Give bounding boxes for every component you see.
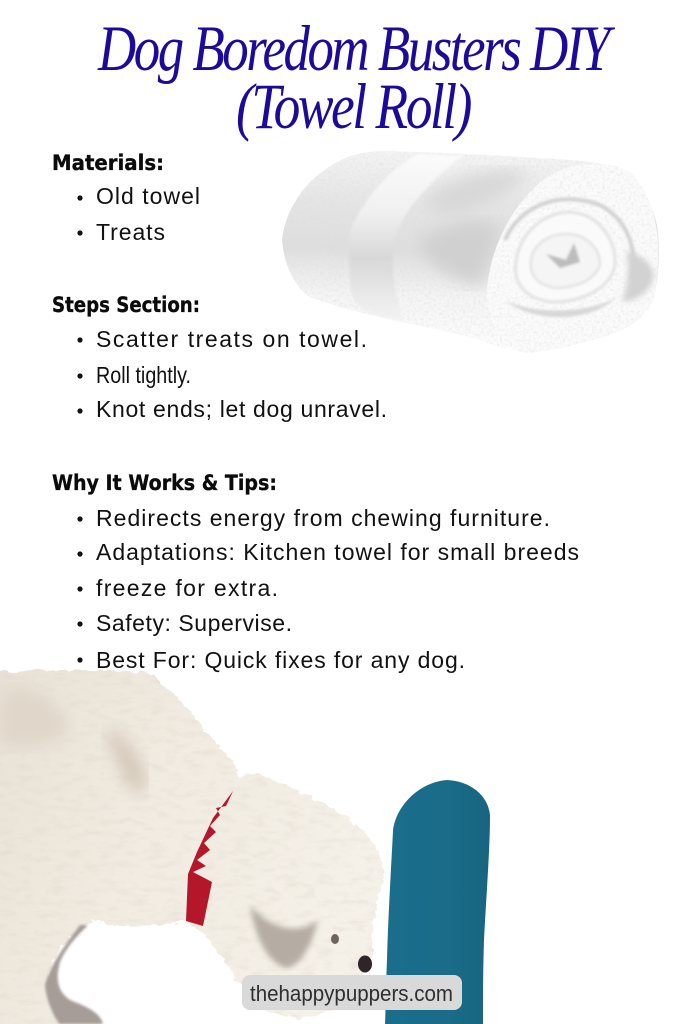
website badge: thehappypuppers.com: [250, 981, 453, 1006]
dog red collar: [186, 791, 233, 926]
list: steps: Roll tightly.: [96, 362, 191, 388]
list: why it works and tips: [77, 505, 579, 673]
list: why it works and tips: Redirects energy from chewing furniture.: [96, 505, 550, 531]
heading: materials: Materials:: [52, 151, 164, 175]
list: steps: [77, 326, 387, 422]
list: why it works and tips: Adaptations: Kitchen towel for small breeds: [96, 539, 579, 565]
list: steps: Scatter treats on towel.: [96, 326, 367, 352]
dog shading: [105, 729, 145, 795]
dog eye: [331, 934, 339, 944]
title: [97, 13, 615, 143]
list: why it works and tips: freeze for extra.: [96, 575, 278, 601]
towel grey shading: [420, 221, 500, 285]
towel spiral end: [487, 164, 658, 353]
image: white dog sniffing: [0, 670, 384, 1024]
heading: steps: Steps Section:: [52, 293, 200, 317]
towel woven band: [349, 154, 462, 322]
dog body and head: [0, 670, 384, 1024]
title: (Towel Roll): [236, 71, 471, 143]
dog back leg shadow: [45, 925, 103, 1024]
dog ear: [250, 905, 318, 968]
dog nose: [358, 956, 372, 972]
image: rolled white towel: [282, 151, 659, 353]
list: materials: Treats: [96, 219, 165, 245]
list: steps: Knot ends; let dog unravel.: [96, 396, 387, 422]
heading: why it works and tips: Why It Works & Tips:: [52, 471, 277, 495]
website badge: [242, 975, 462, 1010]
list: why it works and tips: Safety: Supervise.: [96, 610, 292, 636]
image: teal rolled towel: [385, 780, 490, 1024]
list: why it works and tips: Best For: Quick fixes for any dog.: [96, 647, 465, 673]
list: materials: Old towel: [96, 183, 200, 209]
list: materials: [77, 183, 200, 245]
